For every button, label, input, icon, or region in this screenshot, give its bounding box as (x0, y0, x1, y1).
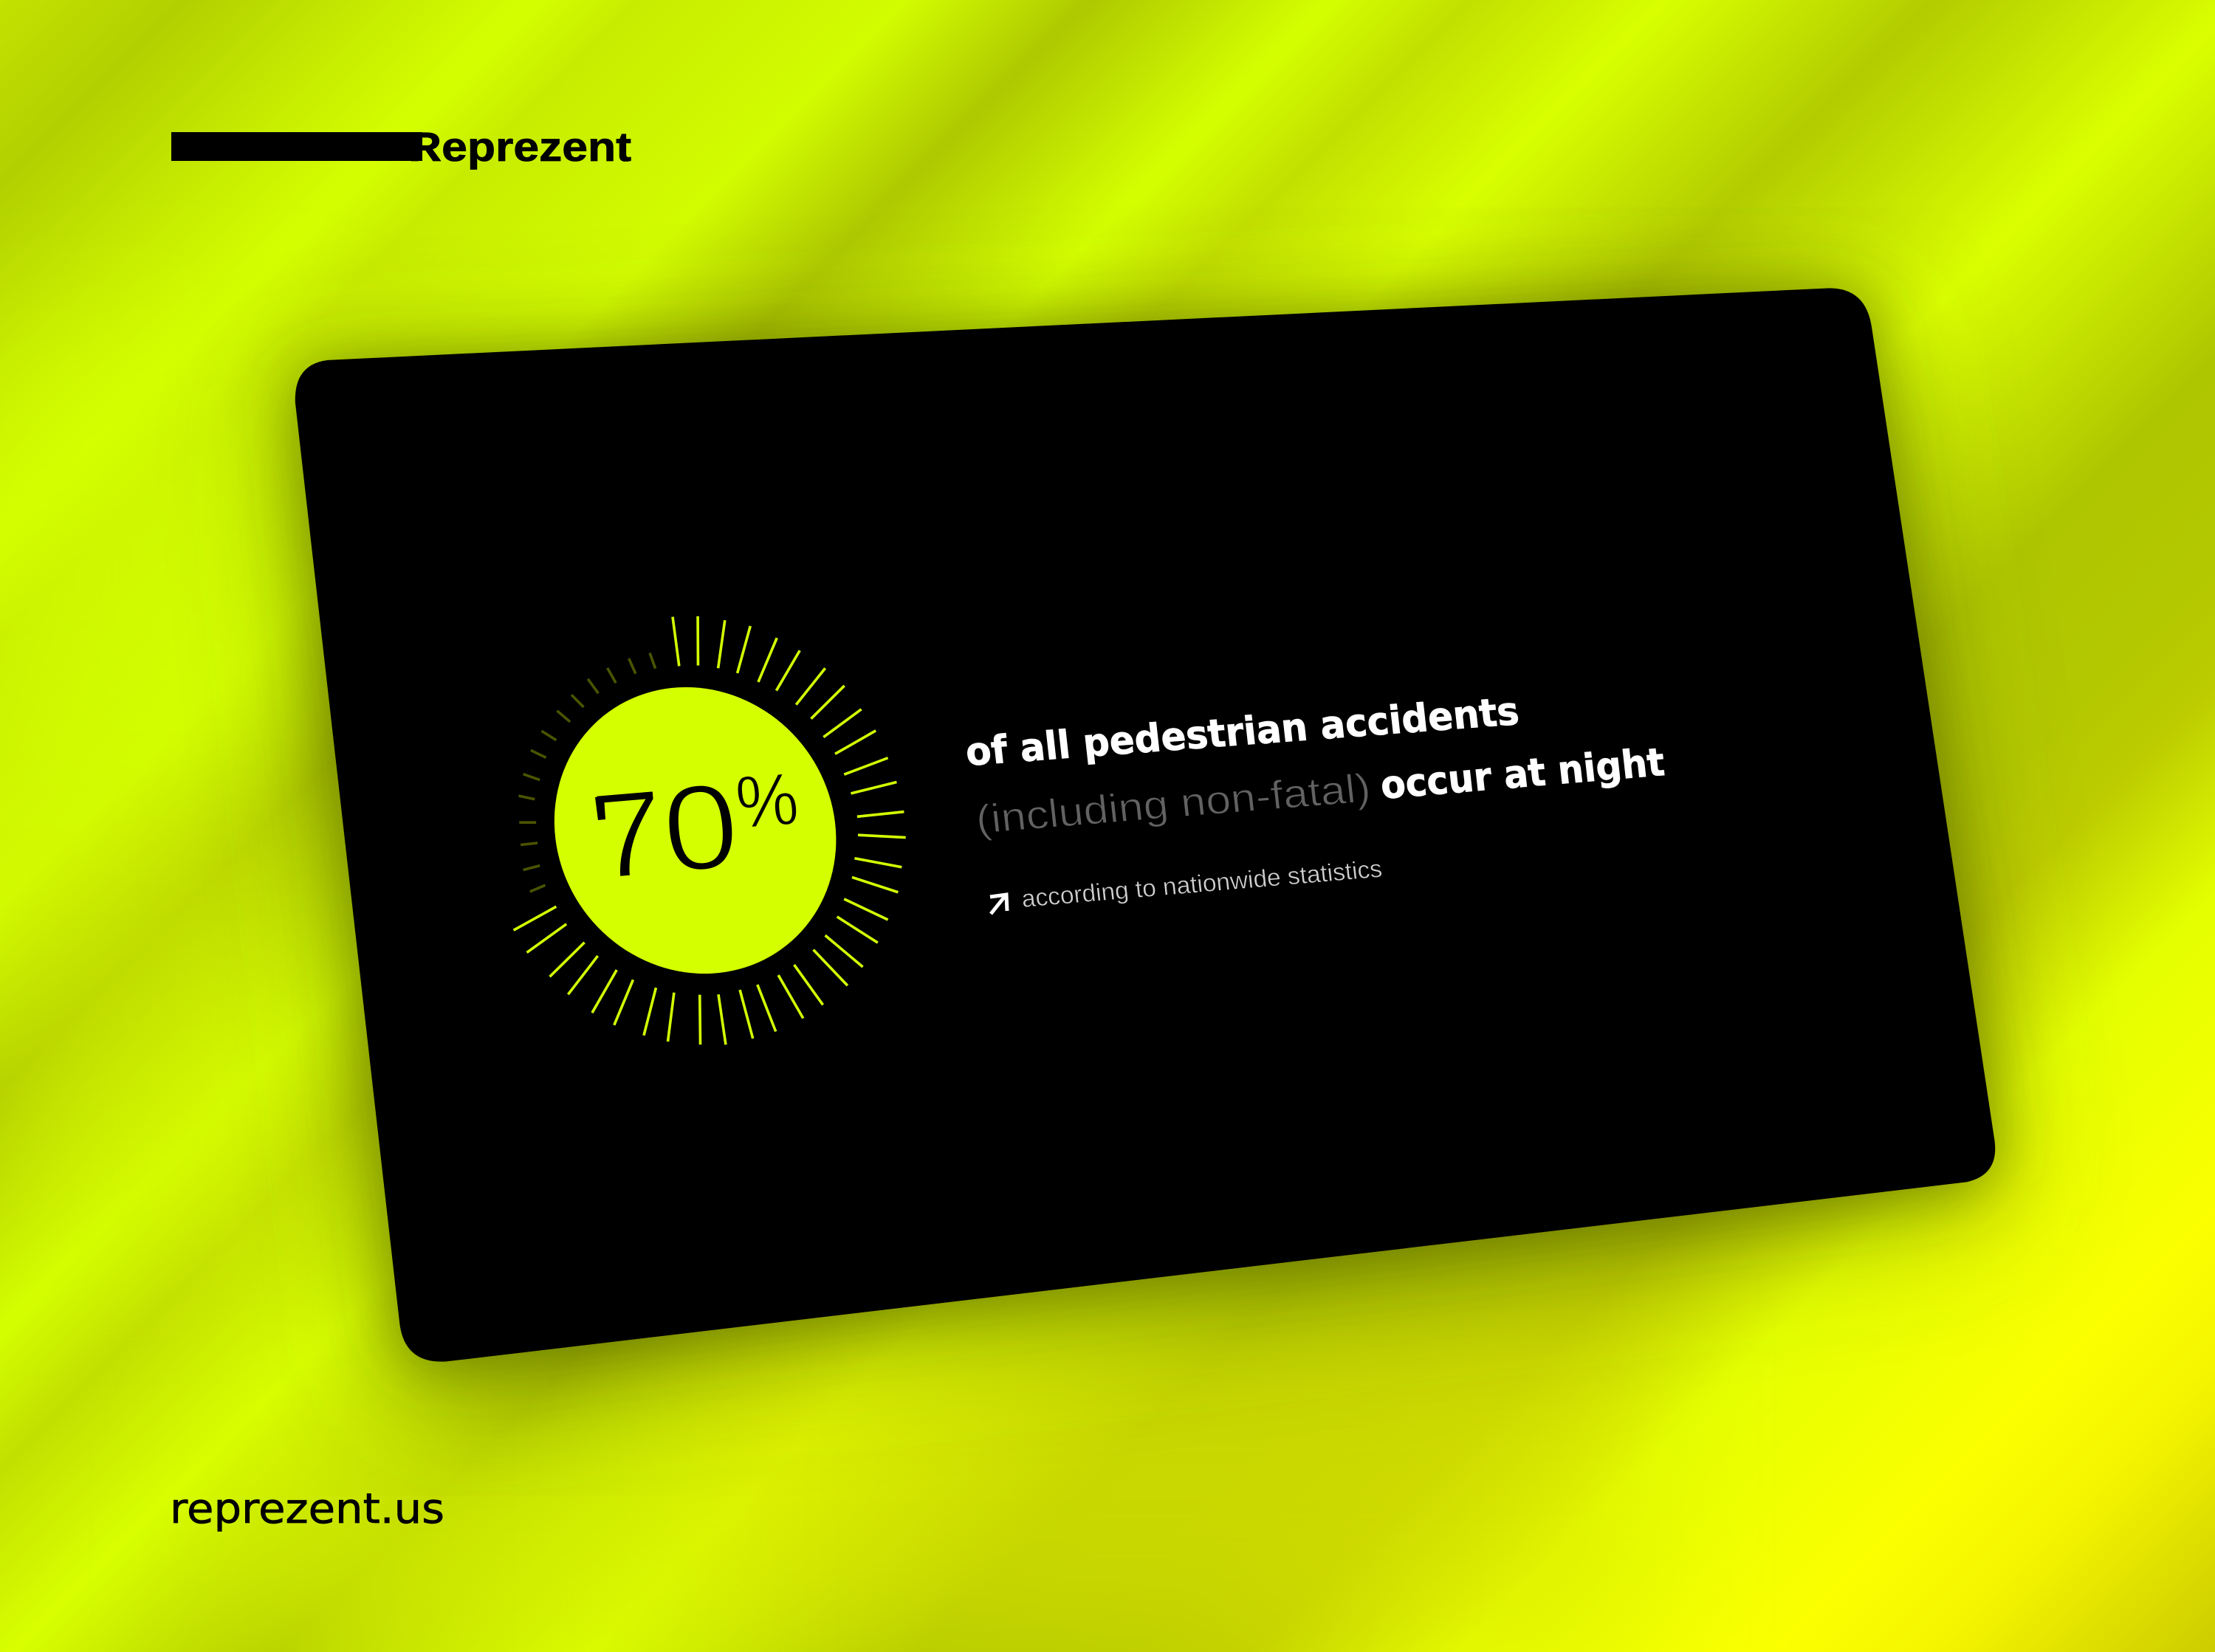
headline line 2: bold ending: occur at night (1378, 740, 1666, 808)
big number 70 percent: 0 (657, 757, 744, 898)
gauge disc (513, 640, 877, 1021)
big number 70 percent (587, 757, 802, 905)
logo: redacted bar and Reprezent wordmark (171, 123, 631, 170)
big number 70 percent: 7 (587, 763, 670, 905)
dim ticks (518, 653, 656, 892)
icon: up-right arrow (990, 895, 1007, 914)
headline line 2: muted parenthetical: (including non-fatal) (974, 765, 1373, 842)
source note: according to nationwide statistics (1020, 856, 1384, 913)
card shadow (295, 294, 1995, 1388)
panel: black tilted card (295, 288, 1995, 1362)
logo: redacted bar and Reprezent wordmark: Reprezent (408, 123, 631, 170)
footer url: reprezent.us (170, 1485, 444, 1533)
chart: radial tick gauge at 70 percent (513, 616, 906, 1044)
headline line 1: of all pedestrian accidents (964, 689, 1521, 775)
lit ticks (514, 616, 906, 1044)
big number 70 percent: % (732, 757, 802, 844)
